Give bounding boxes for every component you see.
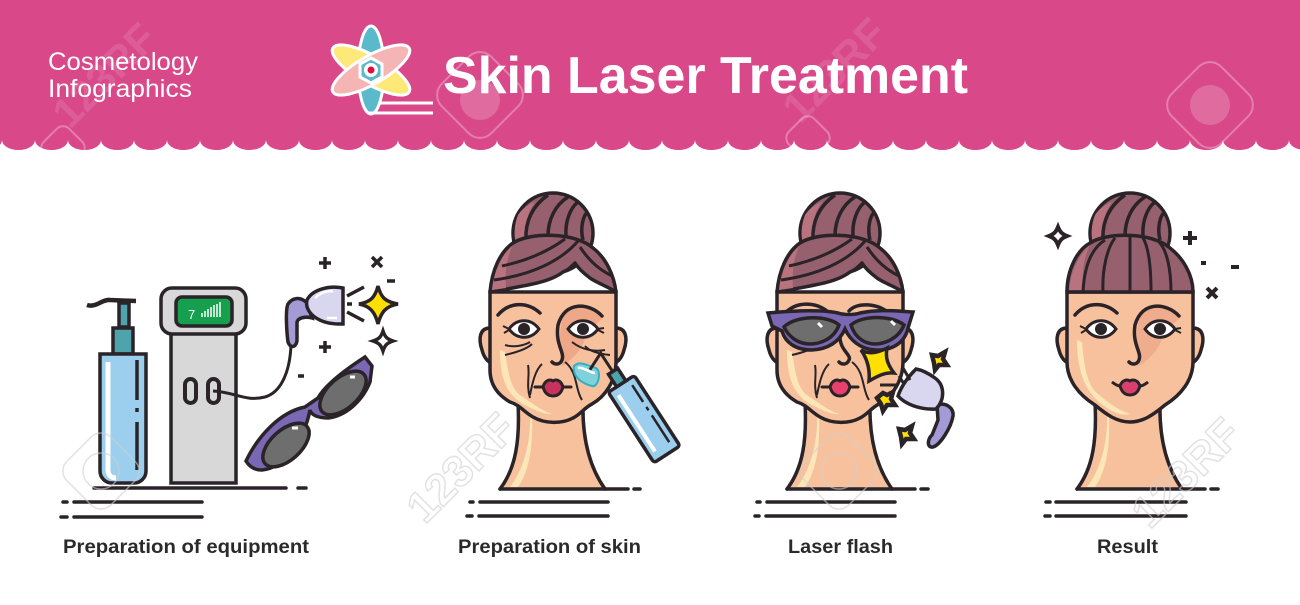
label: Preparation of equipment xyxy=(63,537,310,558)
head: young face xyxy=(1057,193,1203,489)
watermark shapes xyxy=(38,9,1259,173)
icon: laser machine xyxy=(161,288,291,483)
panel: result xyxy=(1045,193,1239,558)
icon: laser flash stars xyxy=(861,348,947,444)
watermarks on body: 123RF xyxy=(1122,409,1250,537)
base lines xyxy=(61,488,306,517)
subtitle: Cosmetology Infographics: Cosmetology xyxy=(48,48,199,76)
subtitle: Cosmetology Infographics xyxy=(48,48,199,103)
base lines xyxy=(1045,489,1218,516)
panel: preparation of equipment xyxy=(61,257,398,558)
panel: preparation of skin xyxy=(458,193,680,558)
watermark shapes: 123RF xyxy=(43,14,166,136)
icon: laser machine: 7 xyxy=(188,307,195,322)
title: Skin Laser Treatment xyxy=(443,47,968,105)
icon: sunglasses on face xyxy=(768,311,913,350)
header banner xyxy=(0,0,1300,150)
head: aged face xyxy=(480,193,626,489)
label: Preparation of skin xyxy=(458,537,641,558)
icon: sparkles and marks xyxy=(1049,227,1239,298)
label: Laser flash xyxy=(788,537,893,558)
icon: atom logo xyxy=(326,26,433,114)
icon: protective sunglasses xyxy=(246,357,374,475)
watermark shapes: 123RF xyxy=(773,9,896,131)
head: aged face with glasses xyxy=(767,193,913,489)
watermarks on body xyxy=(57,404,1250,537)
icon: cleanser bottle xyxy=(87,300,146,483)
base lines xyxy=(467,489,640,516)
subtitle: Cosmetology Infographics: Infographics xyxy=(48,75,192,103)
icon: gel on cheek xyxy=(574,363,599,386)
watermarks on body: 123RF xyxy=(397,404,525,532)
icon: laser handpiece xyxy=(880,368,953,447)
base lines xyxy=(755,489,928,516)
icon: gel bottle xyxy=(586,344,680,464)
label: Result xyxy=(1097,537,1159,558)
icon: laser handpiece with sparkles xyxy=(286,257,398,376)
panel: laser flash xyxy=(755,193,953,558)
